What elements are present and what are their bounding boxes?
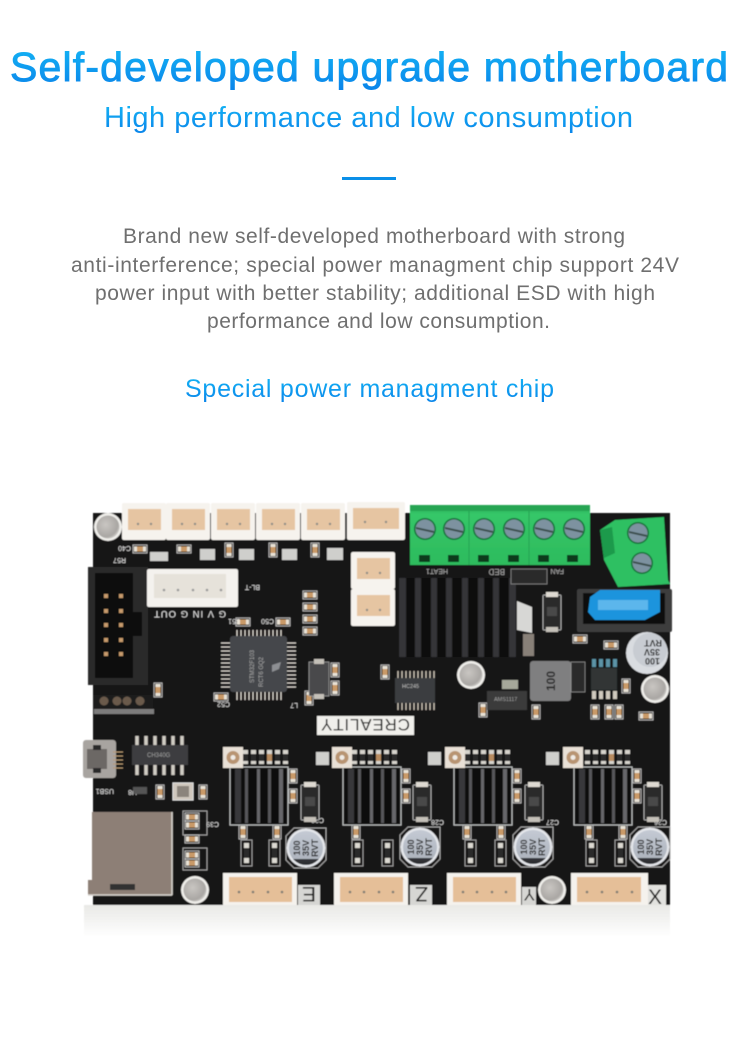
silkscreen labels: [96, 544, 667, 827]
silkscreen labels: C52: [217, 700, 230, 707]
main MCU chip: RCT6 GQ2: [259, 656, 265, 687]
CH340 chip: CH340G: [147, 753, 171, 759]
axis labels E Z Y X: E: [302, 882, 316, 905]
silkscreen labels: C40: [118, 544, 131, 551]
axis labels E Z Y X: X: [648, 886, 662, 909]
silkscreen labels: R57: [113, 556, 126, 563]
description text block: Brand new self-developed motherboard with strong: [123, 225, 625, 248]
small resistor rows beside SD: [183, 811, 207, 870]
CH340 chip: [132, 736, 188, 775]
silkscreen labels: C51: [228, 617, 241, 624]
ICs: HC245, AMS1117, regulator: AMS1117: [494, 697, 517, 703]
small green terminal block: [600, 517, 670, 587]
circuit board photo: [83, 502, 672, 937]
bottom motor connectors: [223, 873, 648, 905]
electrolytic capacitors: [286, 827, 670, 868]
title: Self-developed upgrade motherboard: [10, 44, 728, 90]
top connectors: [122, 502, 405, 540]
crystal: [133, 783, 193, 800]
ICs: HC245, AMS1117, regulator: HC245: [402, 684, 419, 690]
large heatsink: [398, 578, 532, 657]
blue fuse and holder: [577, 589, 672, 632]
inductor: 100: [544, 671, 558, 691]
CREALITY label: CREALITY: [321, 715, 410, 734]
stepper driver heatsinks: [230, 767, 632, 825]
micro USB port: [83, 740, 123, 778]
main MCU chip: STM32F103: [250, 649, 256, 683]
ICs: HC245, AMS1117, regulator: [395, 659, 617, 710]
label tabs: [150, 548, 559, 765]
silkscreen labels: C50: [261, 617, 274, 624]
description text block: performance and low consumption.: [207, 310, 550, 333]
current sense resistors: [241, 840, 626, 866]
board PCB: [93, 513, 670, 905]
silkscreen labels: G V IN G OUT: [154, 608, 226, 619]
silkscreen labels: BL-T: [244, 583, 260, 590]
silkscreen labels: C27: [546, 818, 559, 825]
silkscreen labels: HEAT1: [426, 567, 448, 574]
silkscreen labels: U8: [128, 788, 137, 795]
top right capacitor: 100: [645, 656, 660, 666]
top right capacitor: RVT: [644, 638, 662, 648]
silkscreen labels: BED: [488, 567, 505, 576]
description text block: [71, 225, 679, 333]
silkscreen labels: USB1: [96, 787, 114, 794]
silkscreen labels: FAN: [550, 567, 564, 574]
main MCU chip: [221, 630, 296, 700]
axis labels E Z Y X: [298, 882, 666, 909]
silkscreen labels: L7: [290, 701, 298, 708]
inductor: [530, 661, 585, 701]
BL-T connector: [147, 569, 238, 607]
top right capacitor: [626, 632, 668, 674]
description text block: power input with better stability; additional ESD with high: [95, 282, 655, 305]
box header connector: [88, 567, 148, 685]
fan connectors: [351, 552, 395, 626]
board reflection: [84, 905, 670, 937]
SD card slot: [88, 812, 172, 895]
axis labels E Z Y X: Y: [524, 885, 535, 904]
header pins: [93, 695, 154, 714]
trim pots: [223, 747, 583, 768]
silkscreen labels: C28: [311, 816, 324, 823]
regulator component near MCU: [309, 659, 329, 699]
silkscreen labels: C26: [654, 818, 667, 825]
subtitle: High performance and low consumption: [104, 102, 633, 134]
mounting holes: [94, 513, 669, 904]
section heading: Special power managment chip: [185, 375, 554, 403]
top right capacitor: 35V: [644, 647, 660, 657]
accent line: [342, 177, 396, 180]
small SMD components: [133, 543, 653, 867]
silkscreen labels: C39: [206, 820, 219, 827]
power diodes: [511, 569, 561, 656]
description text block: anti-interference; special power managment chip support 24V: [71, 254, 679, 277]
axis labels E Z Y X: Z: [415, 882, 428, 905]
resistor banks: [243, 750, 630, 764]
driver diodes: [301, 782, 662, 822]
silkscreen labels: C28: [431, 818, 444, 825]
large green terminal block: [410, 505, 590, 565]
